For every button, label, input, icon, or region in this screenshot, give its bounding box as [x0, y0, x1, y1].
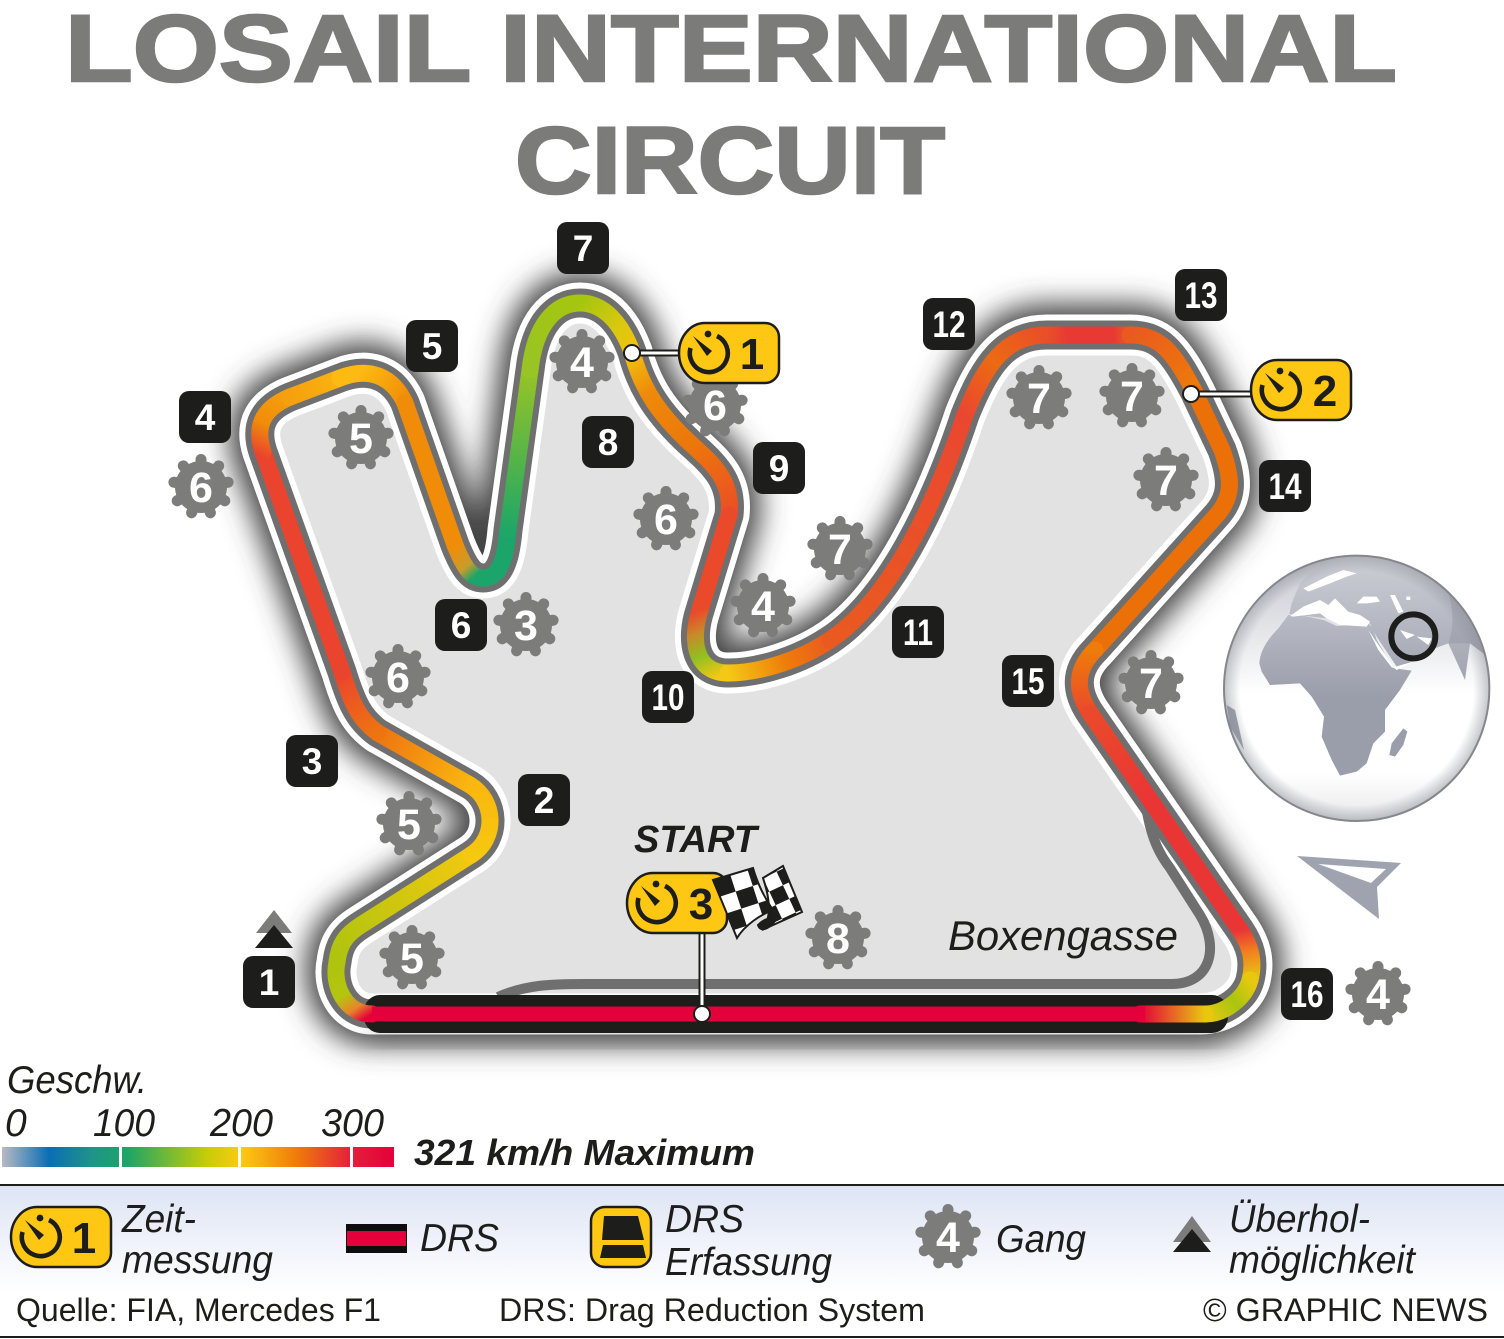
speed legend: 321 km/h Maximum: [414, 1132, 755, 1173]
timing sector 3: [627, 873, 727, 1022]
turn badge 11: [892, 606, 944, 658]
turn badge 2: 2: [534, 780, 554, 821]
gear 5: [385, 930, 439, 984]
gear 6: 6: [703, 382, 727, 430]
gear 5: 5: [400, 935, 424, 983]
legend: overtaking: [1173, 1198, 1417, 1282]
gear 7: [1012, 370, 1066, 424]
legend: overtaking: möglichkeit: [1229, 1239, 1417, 1282]
turn badge 10: 10: [652, 677, 684, 718]
gear 7: [813, 522, 867, 575]
turn badge 8: [582, 416, 634, 468]
legend: DRS detection: [591, 1198, 832, 1284]
speed legend: Geschw.: [7, 1059, 147, 1102]
gear 7: 7: [1139, 660, 1163, 708]
turn badge 3: [286, 735, 338, 787]
Mediterranean and inland seas: [1290, 570, 1432, 670]
turn badge 5: [406, 320, 458, 372]
turn badge 16: 16: [1290, 974, 1324, 1015]
gear 5: [334, 410, 388, 464]
timing sector 1: [624, 323, 779, 383]
turn badge 13: 13: [1184, 275, 1218, 316]
turn badge 12: 12: [932, 304, 966, 345]
turn badge 5: 5: [422, 326, 442, 367]
gear 7: 7: [1027, 375, 1051, 423]
turn badge 11: 11: [903, 612, 933, 653]
turn badge 7: 7: [573, 228, 593, 269]
turn badge 7: [557, 222, 609, 274]
turn badge 9: [753, 442, 805, 494]
turn badge 4: 4: [195, 397, 216, 438]
gear 6: [174, 460, 228, 513]
legend: DRS: DRS: [420, 1217, 499, 1260]
turn badge 6: [435, 599, 487, 651]
legend: timing: [11, 1198, 273, 1282]
gear 4: [1351, 966, 1405, 1020]
legend: gear: 4: [936, 1214, 960, 1262]
timing sector 2: 2: [1313, 367, 1337, 416]
speed legend: 100: [93, 1102, 155, 1145]
turn badge 2: [518, 774, 570, 826]
turn badge 1: [243, 956, 295, 1008]
gear 5: 5: [349, 415, 373, 463]
timing sector 1: 1: [740, 330, 764, 379]
turn badge 14: 14: [1268, 466, 1302, 507]
gear 6: [639, 492, 693, 545]
icon: overtaking opportunity on track: [255, 910, 293, 948]
turn badge 15: 15: [1012, 661, 1044, 702]
legend: timing: Zeit-: [121, 1198, 196, 1241]
legend: DRS detection: DRS: [665, 1198, 744, 1241]
gear 4: [555, 334, 609, 388]
gear 7: 7: [828, 526, 852, 574]
title: [65, 0, 1397, 214]
gear 8: 8: [826, 915, 850, 963]
turn badge 13: [1175, 269, 1227, 321]
turn badge 8: 8: [598, 422, 618, 463]
Eurasia: [1290, 576, 1484, 680]
locator globe: [1224, 548, 1495, 821]
gear 5: 5: [397, 801, 421, 849]
darker crescent at right edge: [1448, 595, 1482, 652]
DRS zone background: [364, 995, 1228, 1033]
legend: DRS: [346, 1217, 499, 1260]
turn badge 1: 1: [259, 962, 279, 1003]
source credit: Quelle: FIA, Mercedes F1: [16, 1292, 381, 1328]
gear 7: [1105, 368, 1159, 422]
speed legend: 0: [5, 1102, 27, 1145]
speed legend: 200: [209, 1102, 273, 1145]
turn badge 15: [1002, 655, 1054, 707]
Qatar location ring: [1391, 614, 1435, 658]
legend: gear: [921, 1210, 1086, 1263]
DRS note: DRS: Drag Reduction System: [499, 1292, 925, 1328]
track border: [260, 303, 1252, 1014]
turn badge 16: [1281, 968, 1333, 1020]
copyright: © GRAPHIC NEWS: [1203, 1292, 1488, 1328]
gear 6: [688, 378, 742, 431]
legend: timing: messung: [122, 1239, 273, 1282]
turn badge 4: [179, 391, 231, 443]
turn badge 9: 9: [769, 448, 789, 489]
turn badge 6: 6: [451, 605, 471, 646]
timing sector 2: [1183, 360, 1351, 420]
legend: overtaking: Überhol-: [1229, 1198, 1370, 1241]
infield: [260, 303, 1252, 1014]
legend: timing: 1: [72, 1214, 96, 1263]
gear 6: 6: [189, 464, 213, 512]
icon: chequered flag: [713, 866, 802, 938]
start label: START: [634, 819, 760, 861]
north arrow: [1297, 856, 1401, 919]
gear 4: 4: [1366, 971, 1390, 1019]
speed legend: [2, 1059, 755, 1173]
gear 4: 4: [570, 339, 594, 387]
legend: DRS detection: Erfassung: [665, 1241, 832, 1284]
turn badge 10: [642, 671, 694, 723]
gear 3: [499, 598, 553, 651]
speed legend: 300: [321, 1102, 384, 1145]
gear 6: [371, 650, 425, 703]
turn badge 14: [1259, 460, 1311, 512]
gear 5: [382, 796, 436, 850]
track shadow: [260, 303, 1252, 1014]
legend panel: [0, 1184, 1504, 1338]
title: CIRCUIT: [515, 108, 945, 214]
Africa: [1259, 615, 1412, 776]
turn badge 3: 3: [302, 741, 322, 782]
legend: gear: Gang: [996, 1218, 1086, 1261]
gear 4: 4: [751, 583, 775, 631]
gear 4: [736, 578, 790, 632]
gear 7: 7: [1154, 457, 1178, 505]
gear 6: 6: [386, 654, 410, 702]
speed coloured track: [260, 303, 1252, 1014]
pit lane: [498, 812, 1210, 997]
gear 7: [1139, 452, 1193, 506]
turn badge 12: [923, 298, 975, 350]
gear 3: 3: [514, 602, 538, 650]
pit lane label: Boxengasse: [948, 912, 1178, 959]
Madagascar and South America: [1227, 705, 1407, 757]
timing sector 3: 3: [689, 880, 713, 929]
gear 7: [1124, 656, 1178, 709]
gear 8: [811, 910, 865, 964]
gear 6: 6: [654, 496, 678, 544]
shadow below start straight: [370, 1030, 1220, 1046]
gear 7: 7: [1120, 373, 1144, 421]
